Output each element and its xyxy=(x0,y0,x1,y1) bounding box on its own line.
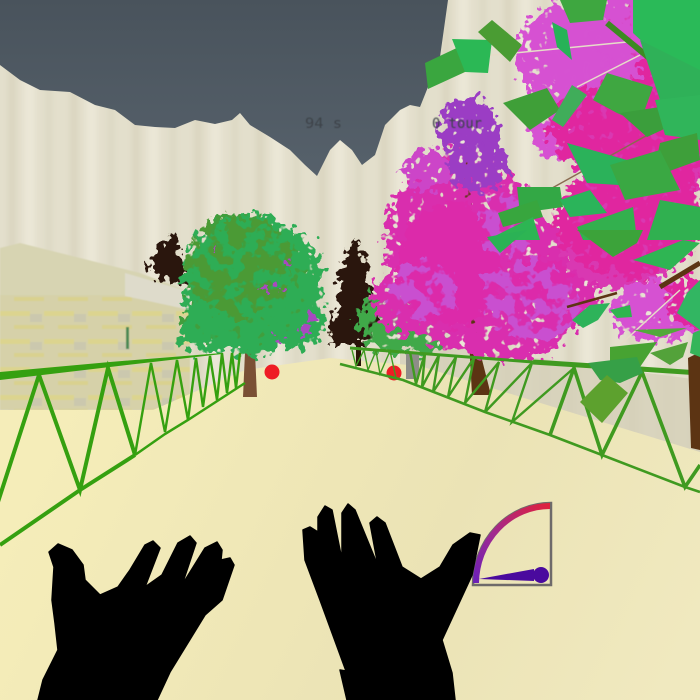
grey box xyxy=(406,352,419,379)
branches xyxy=(463,42,700,345)
dense pink core xyxy=(398,203,570,327)
dark background tree left xyxy=(150,232,190,285)
fruit: left red ball xyxy=(264,364,280,380)
trunk xyxy=(688,352,700,450)
ground xyxy=(0,358,700,700)
foliage xyxy=(183,215,312,347)
gauge arc xyxy=(476,506,550,583)
fruit: right red ball xyxy=(386,366,402,380)
needle hub xyxy=(533,567,549,583)
gauge frame xyxy=(473,503,551,585)
left hand xyxy=(38,536,234,700)
green leaves xyxy=(633,0,700,77)
left fence xyxy=(0,353,245,545)
big foreground tree xyxy=(425,0,700,450)
trunk xyxy=(243,330,257,397)
hud: time remaining: 94 s xyxy=(305,116,342,132)
pink tree xyxy=(373,98,602,395)
trunk xyxy=(463,150,491,395)
speed gauge xyxy=(473,503,551,585)
small green tree behind the pink one xyxy=(357,286,449,354)
purple leaves xyxy=(214,248,316,343)
purple crown xyxy=(406,98,508,192)
solid canopy backing xyxy=(545,5,700,290)
dark background tree right xyxy=(328,238,382,366)
foliage xyxy=(373,150,602,362)
stone wall xyxy=(0,243,190,410)
hud: lap counter: 0 tour xyxy=(432,116,482,132)
needle xyxy=(479,569,534,581)
sky xyxy=(0,0,700,400)
lighter mottled leaves xyxy=(385,195,580,340)
right hand xyxy=(303,504,480,700)
pink canopy xyxy=(515,0,700,340)
mountains xyxy=(0,0,700,452)
green tree xyxy=(177,215,326,397)
right fence xyxy=(340,348,700,492)
